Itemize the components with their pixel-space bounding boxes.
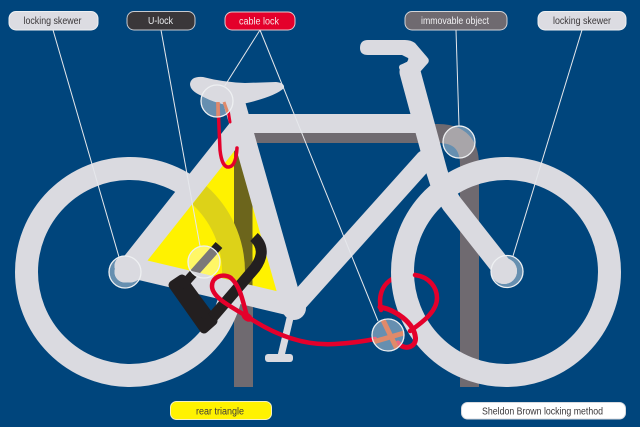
U-lock shackle — [212, 237, 261, 318]
lens highlights — [110, 96, 522, 350]
chain stay — [125, 266, 294, 306]
rear wheel — [26, 168, 234, 376]
label: Sheldon Brown locking method: Sheldon Brown locking method — [482, 406, 603, 418]
label: U-lock — [127, 12, 195, 30]
kickstand — [281, 318, 290, 356]
rear triangle highlight — [148, 150, 277, 292]
main cable — [248, 317, 375, 344]
saddle — [190, 77, 284, 106]
label: locking skewer left: locking skewer — [24, 16, 82, 27]
U-lock crossbar — [173, 279, 213, 329]
top tube — [238, 114, 420, 133]
front wheel loop — [410, 275, 437, 331]
immovable object: bike rack — [244, 134, 470, 387]
label: cable lock: cable lock — [239, 16, 280, 28]
label: rear triangle: rear triangle — [196, 406, 244, 418]
label: U-lock: U-lock — [148, 16, 174, 27]
leader lines — [53, 30, 582, 321]
label: cable lock — [225, 12, 295, 30]
cable lock: upper loop behind wheel — [380, 275, 415, 310]
label: locking skewer right: locking skewer — [553, 16, 612, 27]
bottom bracket — [282, 296, 306, 320]
salmon cable strands seen through lens — [218, 102, 404, 349]
fork and head tube — [410, 72, 500, 265]
cable hook at saddle — [218, 104, 237, 167]
front hub — [491, 258, 517, 284]
handlebar — [360, 40, 429, 72]
U-lock — [173, 237, 261, 329]
label: rear triangle — [170, 402, 272, 420]
label: locking skewer left — [9, 12, 98, 30]
rear hub — [118, 258, 142, 282]
cable loop around chain stay — [212, 276, 248, 317]
cable lock — [212, 103, 437, 347]
seat stay — [125, 127, 240, 272]
small loop — [380, 307, 416, 347]
label: immovable object — [405, 12, 507, 30]
lens rings — [109, 85, 523, 351]
label: immovable object: immovable object — [421, 16, 489, 27]
down tube — [294, 160, 425, 306]
cable knot — [240, 310, 254, 324]
bicycle frame — [118, 40, 517, 362]
front wheel — [402, 168, 610, 376]
label: Sheldon Brown locking method — [462, 402, 626, 419]
label: locking skewer right — [538, 12, 626, 30]
seat tube — [234, 100, 292, 306]
